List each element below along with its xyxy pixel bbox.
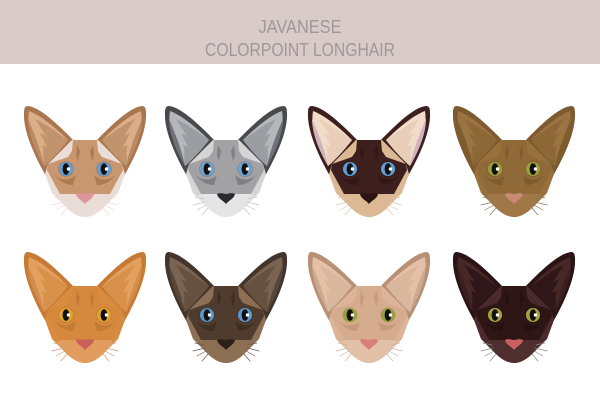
whiskers [336, 197, 402, 215]
title: COLORPOINT LONGHAIR [205, 40, 395, 60]
cat 6: dark brown point [165, 252, 287, 363]
ears [165, 106, 287, 176]
eyes [488, 162, 540, 176]
ears [453, 252, 575, 322]
eyes [200, 308, 252, 322]
head [329, 286, 409, 363]
nose [505, 193, 523, 204]
head [45, 286, 125, 363]
nose [360, 193, 378, 204]
whiskers [481, 343, 547, 361]
ears [24, 252, 146, 322]
title: JAVANESE [258, 17, 342, 37]
eyes [59, 162, 111, 176]
head [186, 286, 266, 363]
whiskers [193, 197, 259, 215]
eyes [488, 308, 540, 322]
whiskers [52, 197, 118, 215]
title [205, 17, 395, 60]
cat 7: cream [308, 252, 430, 363]
ears [308, 252, 430, 322]
ears [24, 106, 146, 176]
head [186, 140, 266, 217]
ears [308, 106, 430, 176]
cat 2: grey point [165, 106, 287, 217]
head [45, 140, 125, 217]
nose [360, 339, 378, 350]
whiskers [481, 197, 547, 215]
head [474, 286, 554, 363]
cat 3: seal point [308, 106, 430, 217]
nose [76, 193, 94, 204]
eyes [343, 162, 395, 176]
whiskers [336, 343, 402, 361]
cat 8: chocolate [453, 252, 575, 363]
ears [165, 252, 287, 322]
nose [505, 339, 523, 350]
cat 1: fawn point [24, 106, 146, 217]
header band [0, 0, 600, 64]
eyes [59, 308, 111, 322]
eyes [200, 162, 252, 176]
nose [76, 339, 94, 350]
cat 4: brown solid [453, 106, 575, 217]
cat 5: ginger [24, 252, 146, 363]
head [474, 140, 554, 217]
whiskers [193, 343, 259, 361]
whiskers [52, 343, 118, 361]
head [329, 140, 409, 217]
ears [453, 106, 575, 176]
nose [217, 193, 235, 204]
eyes [343, 308, 395, 322]
nose [217, 339, 235, 350]
